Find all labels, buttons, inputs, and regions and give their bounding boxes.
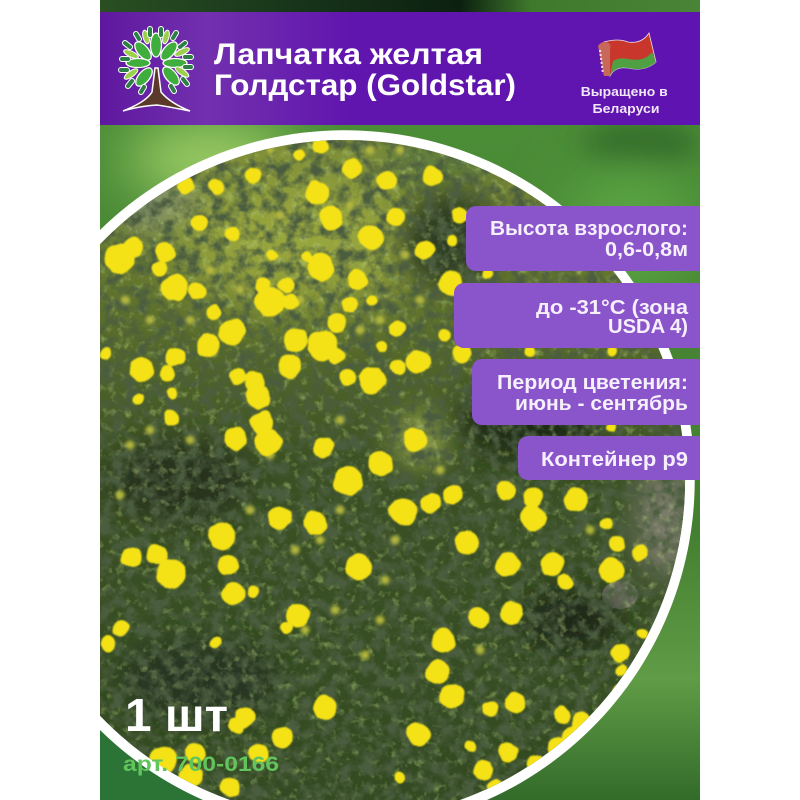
logo: tree <box>121 29 191 111</box>
icon: Belarus flag <box>598 33 656 76</box>
panel: flowering period <box>472 359 700 425</box>
title: Голдстар (Goldstar) <box>214 69 516 102</box>
panel: container <box>518 436 700 480</box>
panel: container: Контейнер р9 <box>541 449 688 471</box>
panel: adult height: Высота взрослого: <box>490 218 688 240</box>
grown in Belarus label: Выращено в <box>581 84 668 99</box>
panel: flowering period: июнь - сентябрь <box>515 393 688 415</box>
panel: frost hardiness <box>454 283 700 348</box>
panel: flowering period: Период цветения: <box>497 372 688 394</box>
panel: frost hardiness: USDA 4) <box>608 316 688 338</box>
header banner <box>100 12 700 125</box>
white circle frame <box>100 130 695 800</box>
panel: frost hardiness: до -31°C (зона <box>536 297 689 319</box>
small yellow-green buds <box>120 150 590 655</box>
article number: арт. 700-0166 <box>123 753 279 776</box>
foliage <box>100 130 700 800</box>
panel: adult height: 0,6-0,8м <box>605 239 688 261</box>
blurred green background <box>100 0 700 800</box>
photo of flowering shrub <box>100 130 700 800</box>
panel: adult height <box>466 206 700 271</box>
quantity label: 1 шт <box>125 689 228 741</box>
title: Лапчатка желтая <box>214 38 483 71</box>
grown in Belarus label: Беларуси <box>592 101 660 116</box>
yellow flowers <box>106 146 642 787</box>
